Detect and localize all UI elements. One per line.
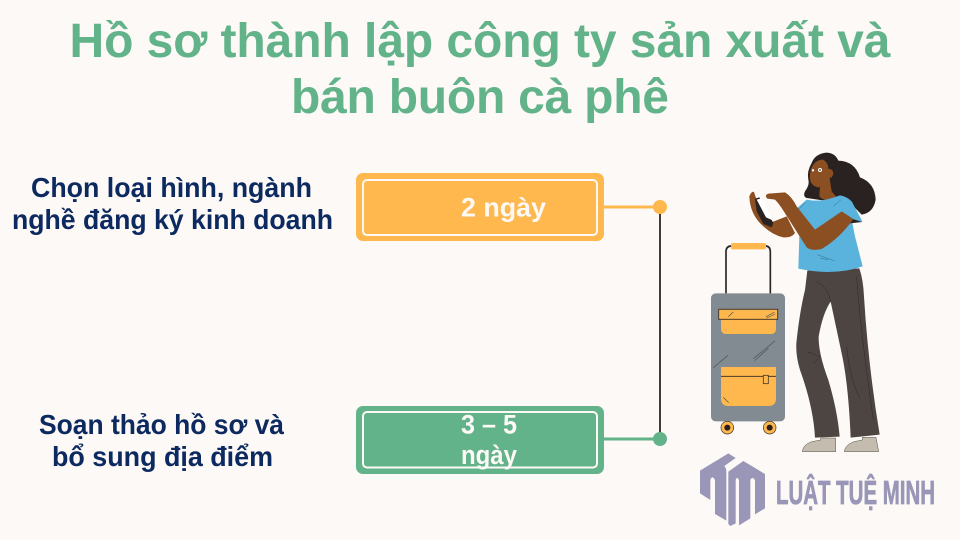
icon: suitcase (711, 243, 785, 434)
icon: logo mark (700, 453, 765, 526)
step 1 box: 2 ngày (356, 173, 604, 241)
step 1 connector and dot (604, 200, 667, 214)
title: bán buôn cà phê (291, 71, 669, 124)
step 1 label: Chọn loại hình, ngành (31, 172, 312, 203)
step 2 label (39, 409, 285, 472)
connector: vertical timeline line (659, 207, 661, 439)
hair (804, 153, 876, 215)
step 1 box: 2 ngày: 2 ngày (461, 192, 546, 222)
upper body (749, 160, 863, 272)
title (70, 15, 891, 124)
step 2 connector and dot (604, 432, 667, 446)
legs (796, 268, 880, 452)
step 1 label: nghề đăng ký kinh doanh (12, 204, 333, 235)
icon: woman figure (749, 153, 880, 452)
illustration: woman with suitcase (711, 153, 880, 452)
step 2 box: 3 – 5 ngày (356, 406, 604, 474)
step 1 label (12, 172, 333, 235)
logo: Luật Tuệ Minh (700, 453, 935, 526)
step 2 label: bổ sung địa điểm (52, 441, 273, 472)
step 2 box: 3 – 5 ngày: ngày (461, 440, 517, 470)
step 2 label: Soạn thảo hồ sơ và (39, 409, 285, 440)
step 2 box: 3 – 5 ngày: 3 – 5 (461, 410, 517, 440)
title: Hồ sơ thành lập công ty sản xuất và (70, 15, 891, 68)
